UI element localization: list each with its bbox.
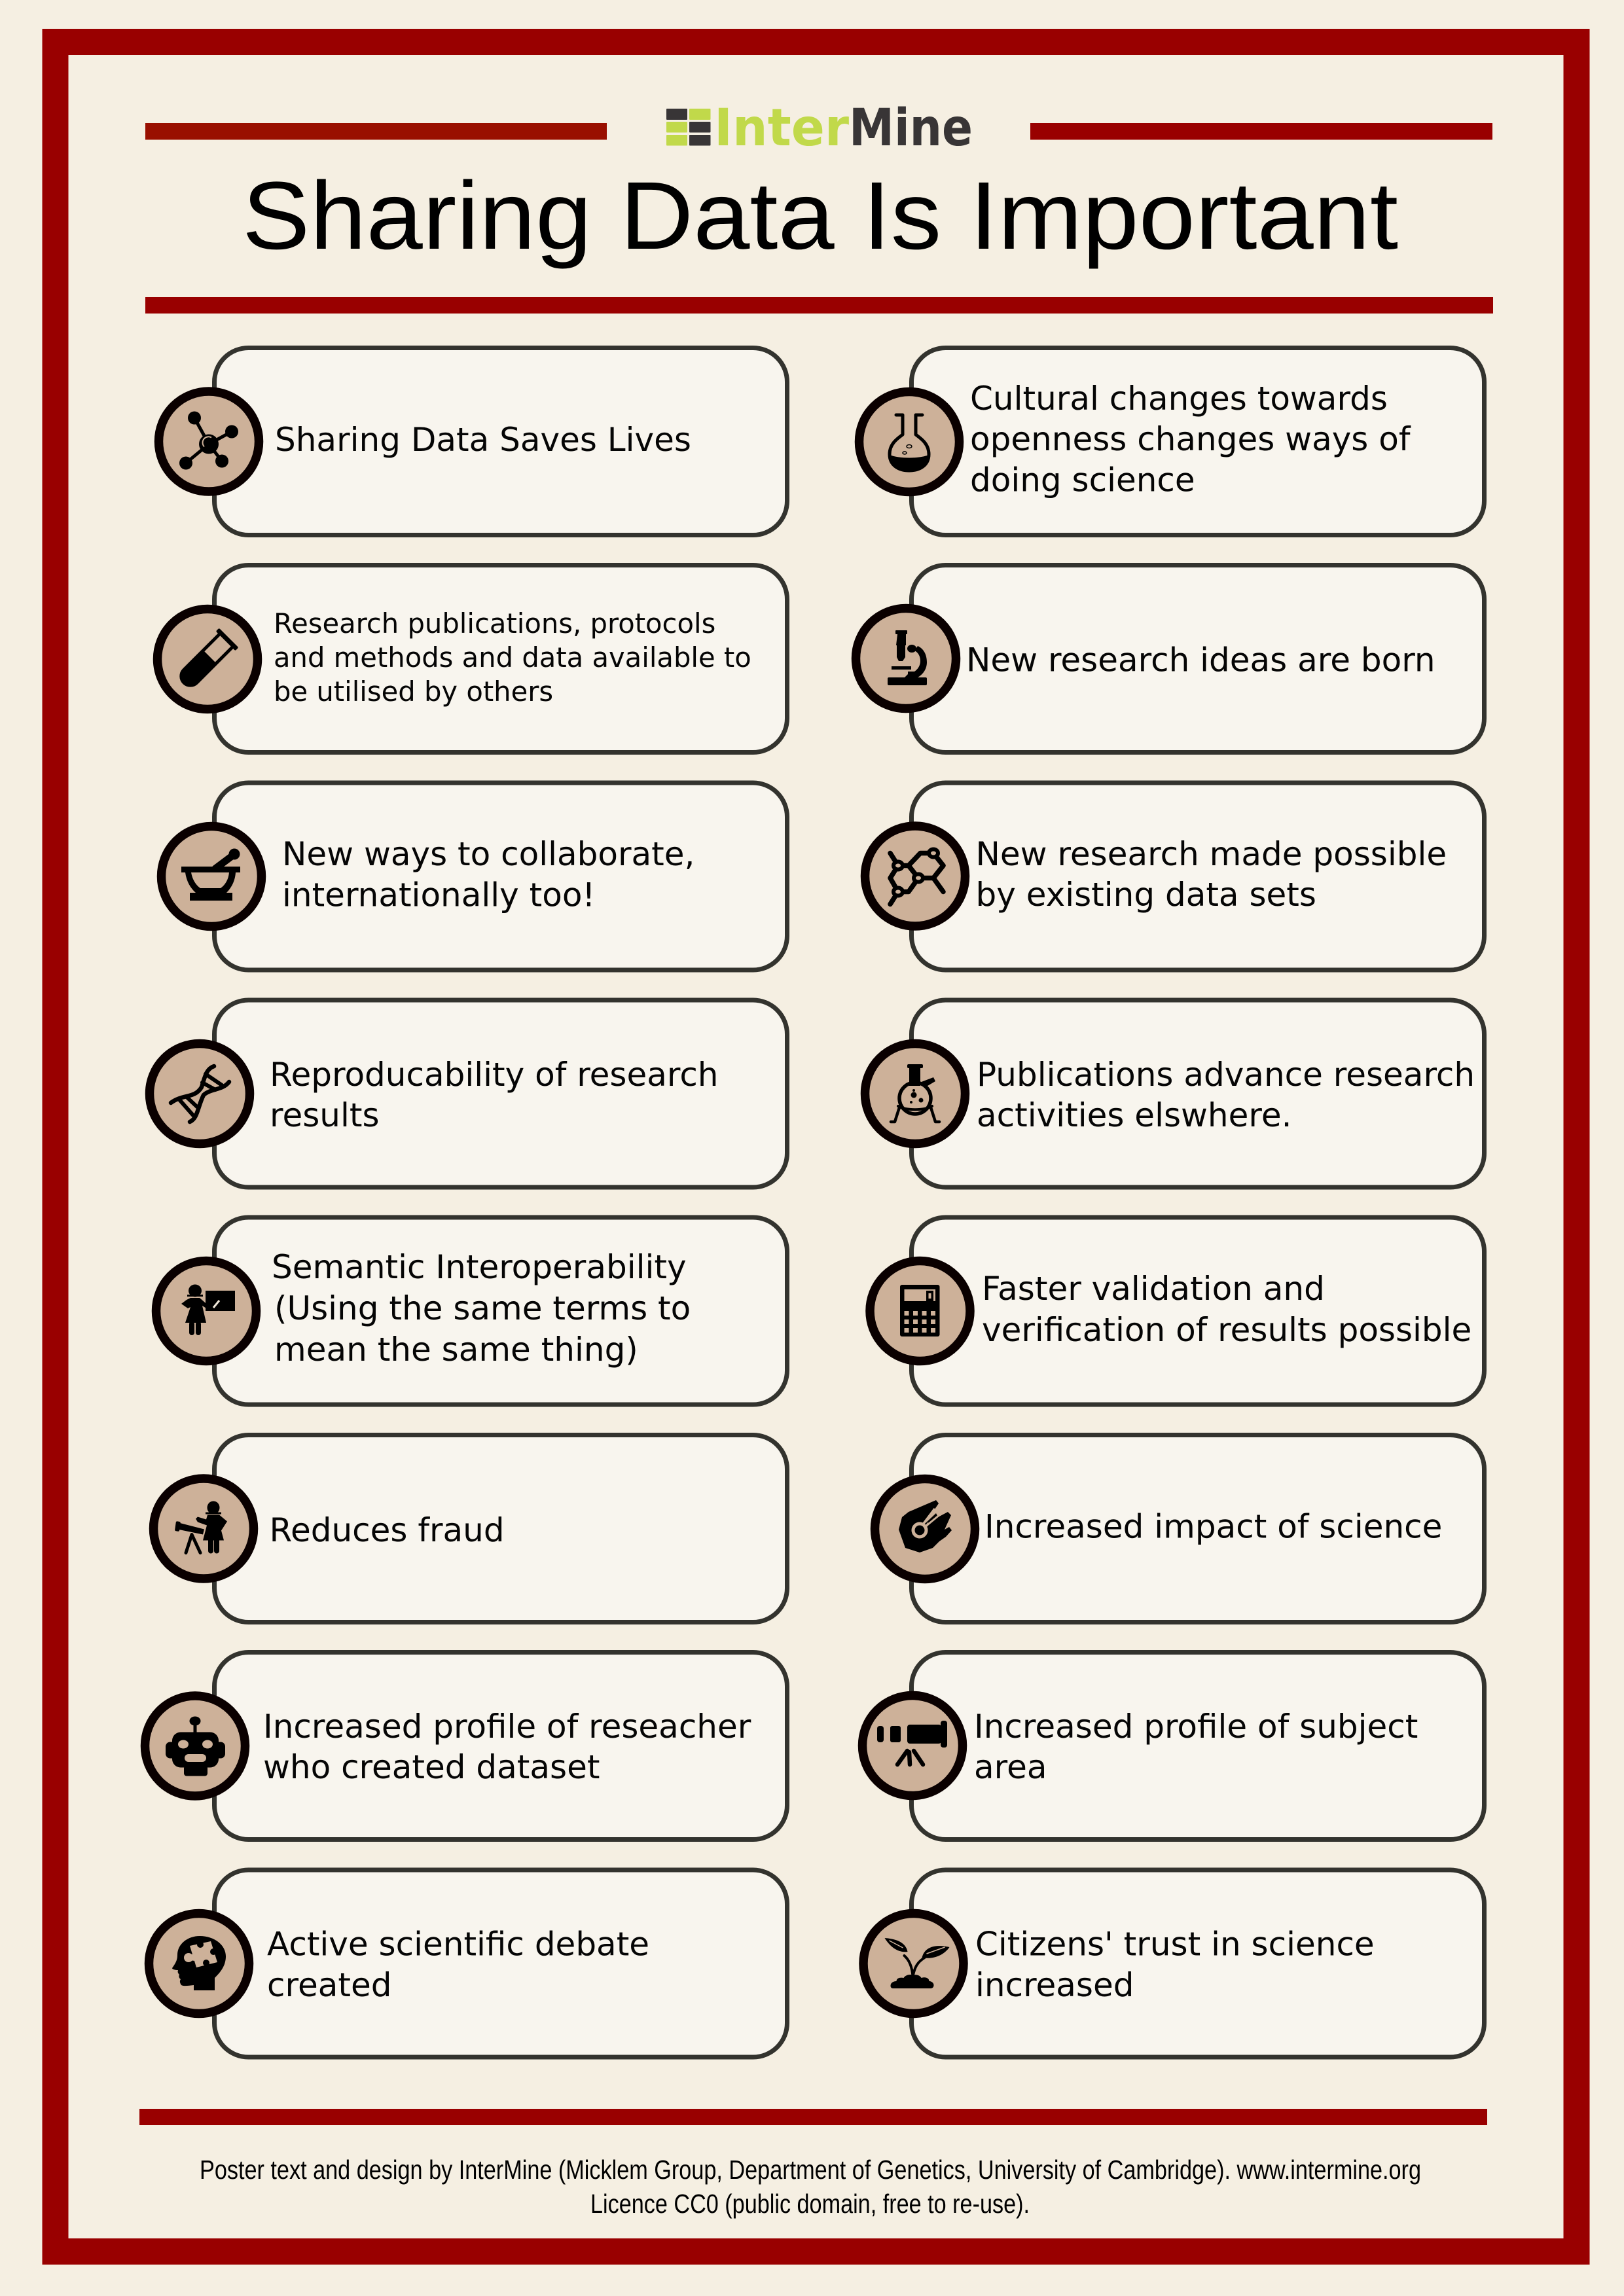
- icon: woman with telescope: [175, 1501, 227, 1554]
- panel: Increased profile of subject: [863, 1652, 1485, 1839]
- panel: New research ideas: [856, 565, 1485, 753]
- text: [974, 1708, 1418, 1786]
- text: Citizens' trust in science: [975, 1926, 1375, 1964]
- text: who created dataset: [263, 1748, 600, 1786]
- icon: seedling: [885, 1938, 949, 1988]
- text: verification of results possible: [982, 1311, 1471, 1349]
- text: [977, 1056, 1475, 1134]
- icon: round flask: [890, 415, 929, 472]
- logo: InterMine: Inter: [714, 99, 850, 158]
- text: [975, 835, 1447, 914]
- logo: InterMine: [666, 99, 973, 158]
- footer text: [200, 2155, 1421, 2219]
- text: Semantic Interoperability: [272, 1248, 687, 1286]
- text: Sharing Data Saves Lives: [275, 421, 691, 459]
- text: [975, 1926, 1375, 2004]
- text: Increased profile of reseacher: [263, 1708, 751, 1746]
- text: doing science: [970, 461, 1195, 499]
- text: New research made possible: [975, 835, 1447, 873]
- text: activities elswhere.: [977, 1096, 1291, 1134]
- panel: Reduces fraud: [153, 1435, 787, 1622]
- icon: robot: [166, 1716, 225, 1776]
- text: [272, 1248, 691, 1369]
- panel: Sharing Data Saves Lives: [158, 348, 787, 535]
- text: Faster validation and: [982, 1270, 1325, 1308]
- text: be utilised by others: [274, 675, 553, 708]
- panel: Publications advance research: [865, 1000, 1485, 1187]
- header right bar: [1030, 123, 1492, 140]
- text: [282, 835, 695, 914]
- footer text: Poster text and design by InterMine (Micklem Group, Department of Genetics, University of Cambridge). www.intermine.org: [200, 2155, 1421, 2185]
- text: Reproducability of research: [270, 1056, 719, 1094]
- text: [970, 380, 1411, 499]
- icon: spaceship: [899, 1500, 952, 1552]
- header left bar: [145, 123, 607, 140]
- panel: New ways to collaborate: [161, 783, 787, 970]
- text: Research publications, protocols: [274, 607, 715, 639]
- text: Reduces fraud: [270, 1511, 505, 1549]
- panel: New research made possible: [865, 783, 1485, 970]
- text: [267, 1926, 649, 2004]
- text: [982, 1270, 1471, 1349]
- text: Publications advance research: [977, 1056, 1475, 1094]
- text: Active scientific debate: [267, 1926, 649, 1964]
- text: openness changes ways of: [970, 420, 1411, 458]
- text: area: [974, 1748, 1047, 1786]
- panel: Reproducability: [149, 1000, 787, 1187]
- text: Increased impact of science: [984, 1508, 1442, 1546]
- panel: Active scientific debate: [149, 1870, 787, 2057]
- icon: head with puzzle piece: [172, 1936, 226, 1990]
- text: New ways to collaborate,: [282, 835, 695, 873]
- panel: Research publications: [157, 565, 787, 753]
- icon: flask on stand: [891, 1064, 939, 1122]
- title: Sharing Data Is Important: [242, 162, 1398, 270]
- text: by existing data sets: [975, 876, 1316, 914]
- icon: network: [179, 411, 238, 470]
- text: [270, 1056, 719, 1134]
- text: (Using the same terms to: [274, 1289, 691, 1327]
- text: created: [267, 1966, 391, 2004]
- icon: teacher at board: [181, 1284, 235, 1335]
- icon: test tube: [173, 628, 238, 693]
- title underline bar: [145, 297, 1493, 314]
- text: and methods and data available to: [274, 641, 751, 673]
- panel: Citizens' trust: [863, 1870, 1485, 2057]
- panel: Cultural changes: [859, 348, 1485, 535]
- panel: Semantic Interoperability: [156, 1217, 787, 1405]
- panel: Increased impact: [875, 1435, 1485, 1622]
- icon: calculator: [900, 1285, 940, 1336]
- text: [274, 607, 751, 708]
- icon: telescope on tripod: [877, 1721, 947, 1765]
- icon: microscope: [888, 630, 927, 685]
- logo: InterMine: Mine: [849, 99, 973, 158]
- icon: mortar and pestle: [181, 848, 240, 901]
- text: Increased profile of subject: [974, 1708, 1418, 1746]
- footer text: Licence CC0 (public domain, free to re-use).: [590, 2189, 1030, 2219]
- text: Cultural changes towards: [970, 380, 1388, 418]
- panel: Increased profile of researcher: [145, 1652, 787, 1839]
- text: internationally too!: [282, 876, 595, 914]
- text: [263, 1708, 751, 1786]
- footer bar: [139, 2109, 1487, 2125]
- icon: molecule: [890, 850, 943, 905]
- text: New research ideas are born: [966, 641, 1435, 679]
- text: mean the same thing): [274, 1331, 638, 1369]
- text: increased: [975, 1966, 1134, 2004]
- text: results: [270, 1096, 380, 1134]
- icon: DNA: [171, 1066, 229, 1122]
- panel: Faster validation: [870, 1217, 1485, 1405]
